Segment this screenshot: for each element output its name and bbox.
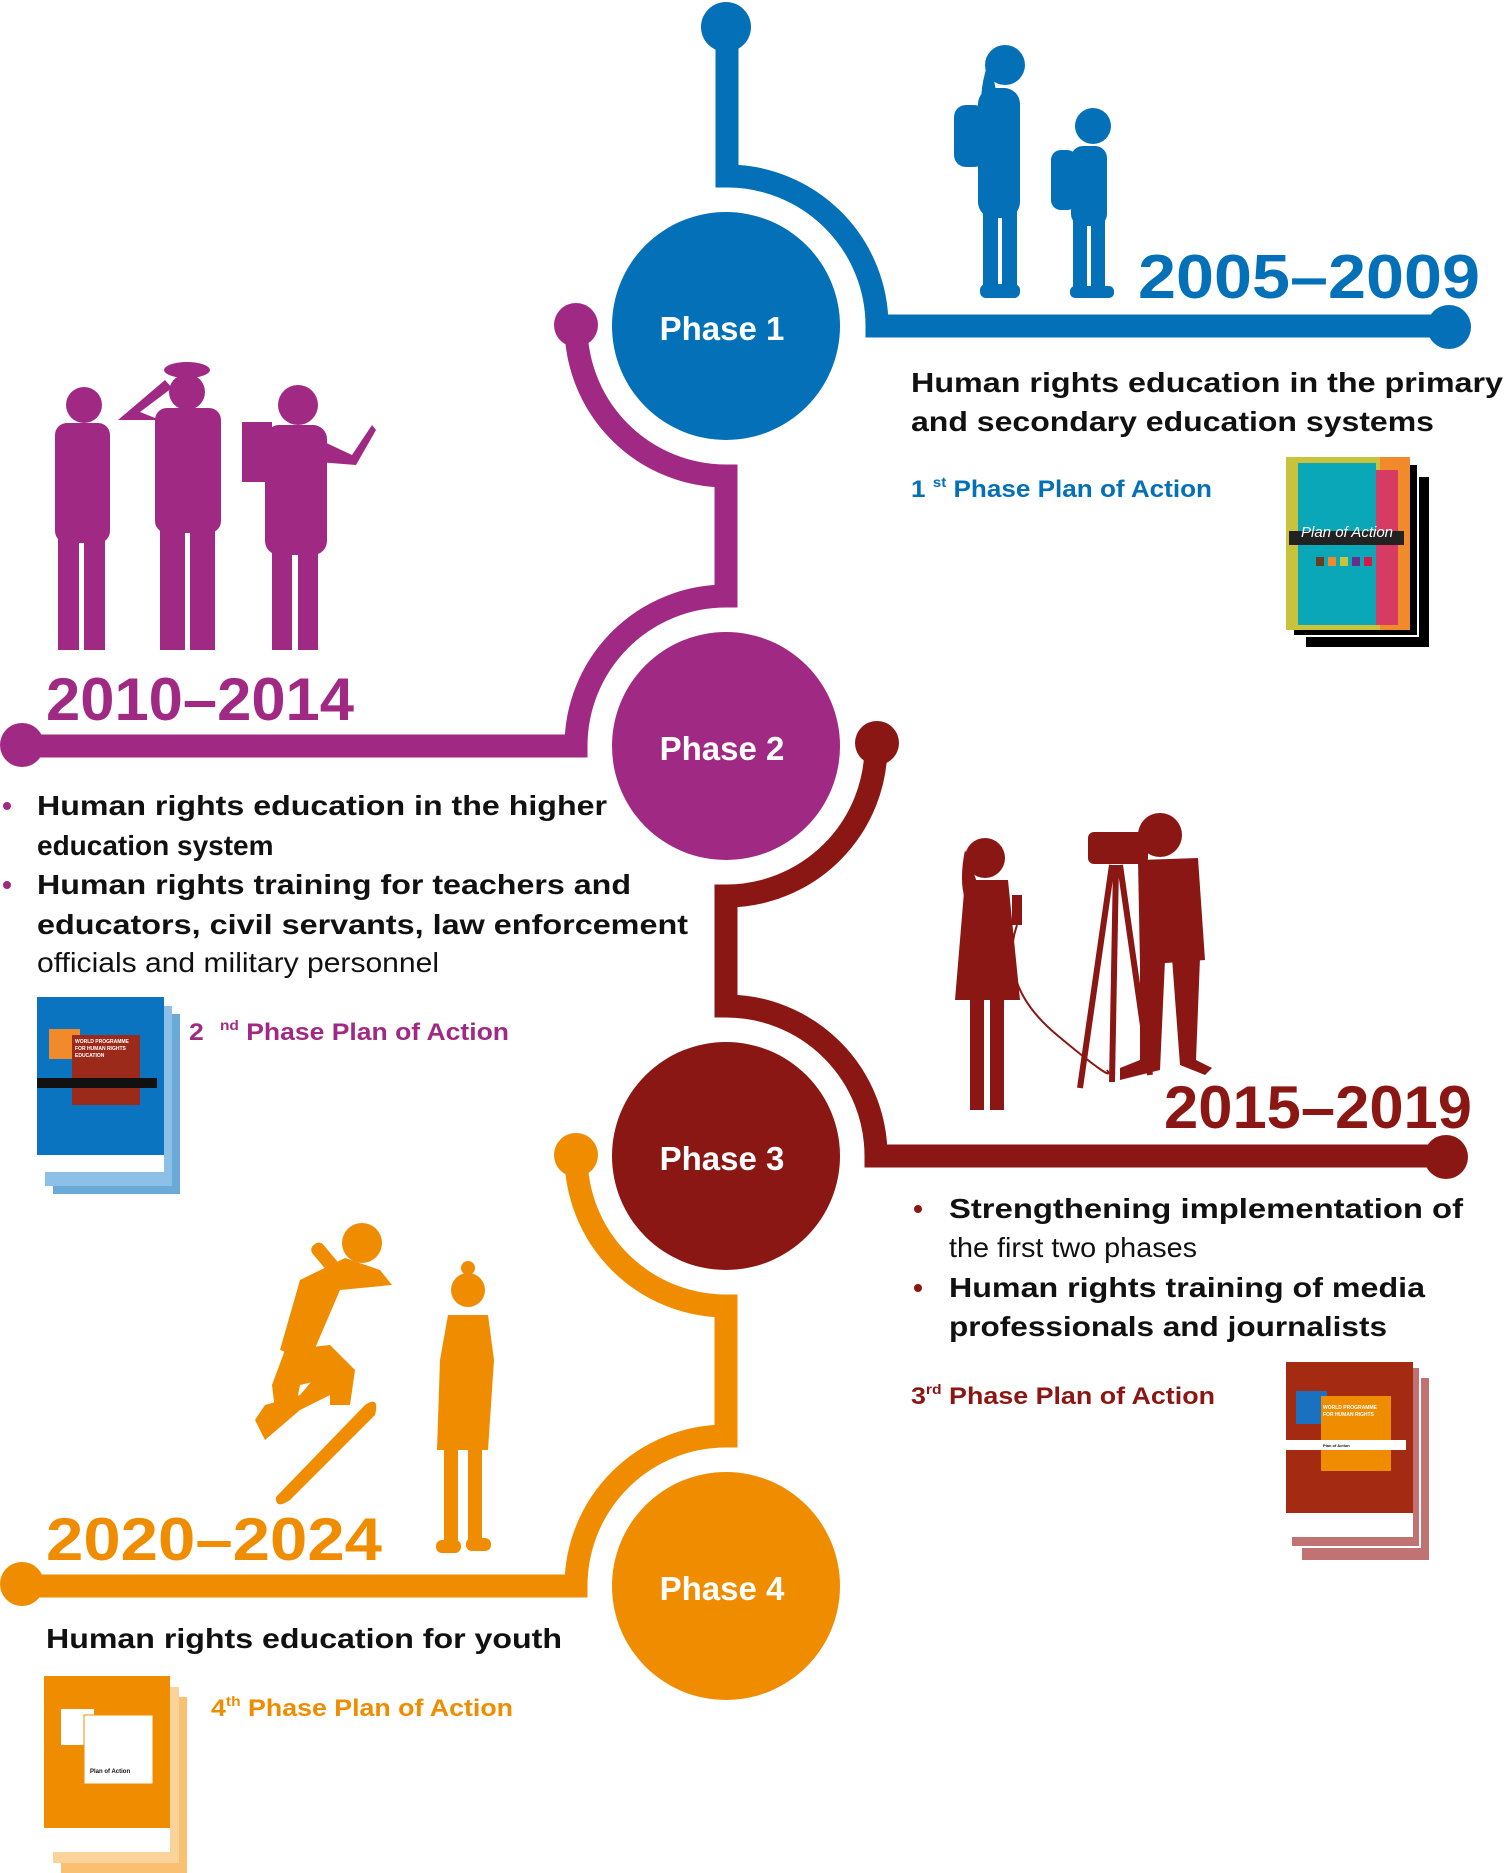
book: 1st phase cover <box>1286 457 1429 647</box>
text: phase 3 description: the first two phases <box>949 1232 1197 1263</box>
phase 4 circle: Phase 4 <box>660 1570 785 1607</box>
label: 4th phase plan: 4 <box>211 1695 224 1722</box>
text: phase 3 description: professionals and journalists <box>949 1311 1387 1342</box>
text: phase 1 description <box>911 367 1503 437</box>
silhouette: professionals (phase 2) <box>55 362 376 650</box>
label: 1st phase plan: 1 <box>911 476 924 503</box>
label: 4th phase plan: th <box>226 1693 241 1709</box>
book: 2nd phase cover: FOR HUMAN RIGHTS <box>75 1046 126 1052</box>
phase 2 circle <box>612 632 840 860</box>
text: phase 3 description: Strengthening implementation of <box>949 1193 1464 1224</box>
year: 2005–2009: 2005–2009 <box>1138 243 1480 312</box>
label: 3rd phase plan: 3 <box>911 1383 924 1410</box>
connector: phase 2 (purple) <box>0 303 726 767</box>
silhouette: journalists (phase 3) <box>955 813 1212 1110</box>
book: 4th phase cover <box>44 1676 187 1873</box>
year: 2010–2014: 2010–2014 <box>46 666 355 733</box>
connector: phase 3 (maroon) <box>726 721 1468 1179</box>
book: 1st phase cover: Plan of Action <box>1301 524 1393 541</box>
phase 1 circle <box>612 212 840 440</box>
text: phase 2 description <box>3 790 688 978</box>
label: 1st phase plan: st <box>933 474 947 490</box>
silhouette: youth (phase 4) <box>255 1223 494 1553</box>
book: 4th phase cover: Plan of Action <box>90 1769 130 1775</box>
book: 2nd phase cover: EDUCATION <box>75 1053 105 1059</box>
silhouette: students (phase 1) <box>954 45 1114 298</box>
text: phase 3 description: Human rights training of media <box>949 1272 1425 1303</box>
text: phase 4 description: Human rights education for youth <box>46 1623 562 1654</box>
text: phase 3 description <box>914 1193 1464 1342</box>
book: 3rd phase cover <box>1286 1362 1429 1560</box>
label: 3rd phase plan: Phase Plan of Action <box>942 1383 1215 1410</box>
book: 2nd phase cover: WORLD PROGRAMME <box>75 1039 130 1045</box>
label: 2nd phase plan: 2 <box>189 1019 202 1046</box>
book: 3rd phase cover: WORLD PROGRAMME <box>1323 1405 1378 1411</box>
text: phase 2 description: officials and military personnel <box>37 947 439 978</box>
label: 2nd phase plan: Phase Plan of Action <box>239 1019 509 1046</box>
book: 3rd phase cover: Plan of Action <box>1323 1443 1350 1448</box>
label: 1st phase plan: Phase Plan of Action <box>946 476 1212 503</box>
book: 3rd phase cover: FOR HUMAN RIGHTS <box>1323 1412 1374 1418</box>
text: phase 1 description: and secondary education systems <box>911 406 1434 437</box>
phase 2 circle: Phase 2 <box>660 730 784 767</box>
label: 2nd phase plan: nd <box>220 1017 239 1033</box>
connector: phase 1 (blue) <box>701 2 1471 349</box>
text: phase 1 description: Human rights education in the primary <box>911 367 1503 398</box>
year: 2015–2019: 2015–2019 <box>1164 1074 1472 1141</box>
text: phase 2 description: education system <box>37 830 274 861</box>
connector: phase 4 (orange) <box>0 1133 726 1606</box>
phase 3 circle <box>612 1042 840 1270</box>
phase 1 circle: Phase 1 <box>660 310 784 347</box>
text: phase 2 description: Human rights training for teachers and <box>37 869 631 900</box>
phase 3 circle: Phase 3 <box>660 1140 784 1177</box>
book: 2nd phase cover <box>37 997 180 1194</box>
text: phase 2 description: Human rights education in the higher <box>37 790 607 821</box>
phase 4 circle <box>612 1472 840 1700</box>
text: phase 2 description: educators, civil servants, law enforcement <box>37 909 688 940</box>
year: 2020–2024: 2020–2024 <box>46 1506 383 1573</box>
label: 3rd phase plan: rd <box>926 1381 942 1397</box>
label: 4th phase plan: Phase Plan of Action <box>241 1695 513 1722</box>
